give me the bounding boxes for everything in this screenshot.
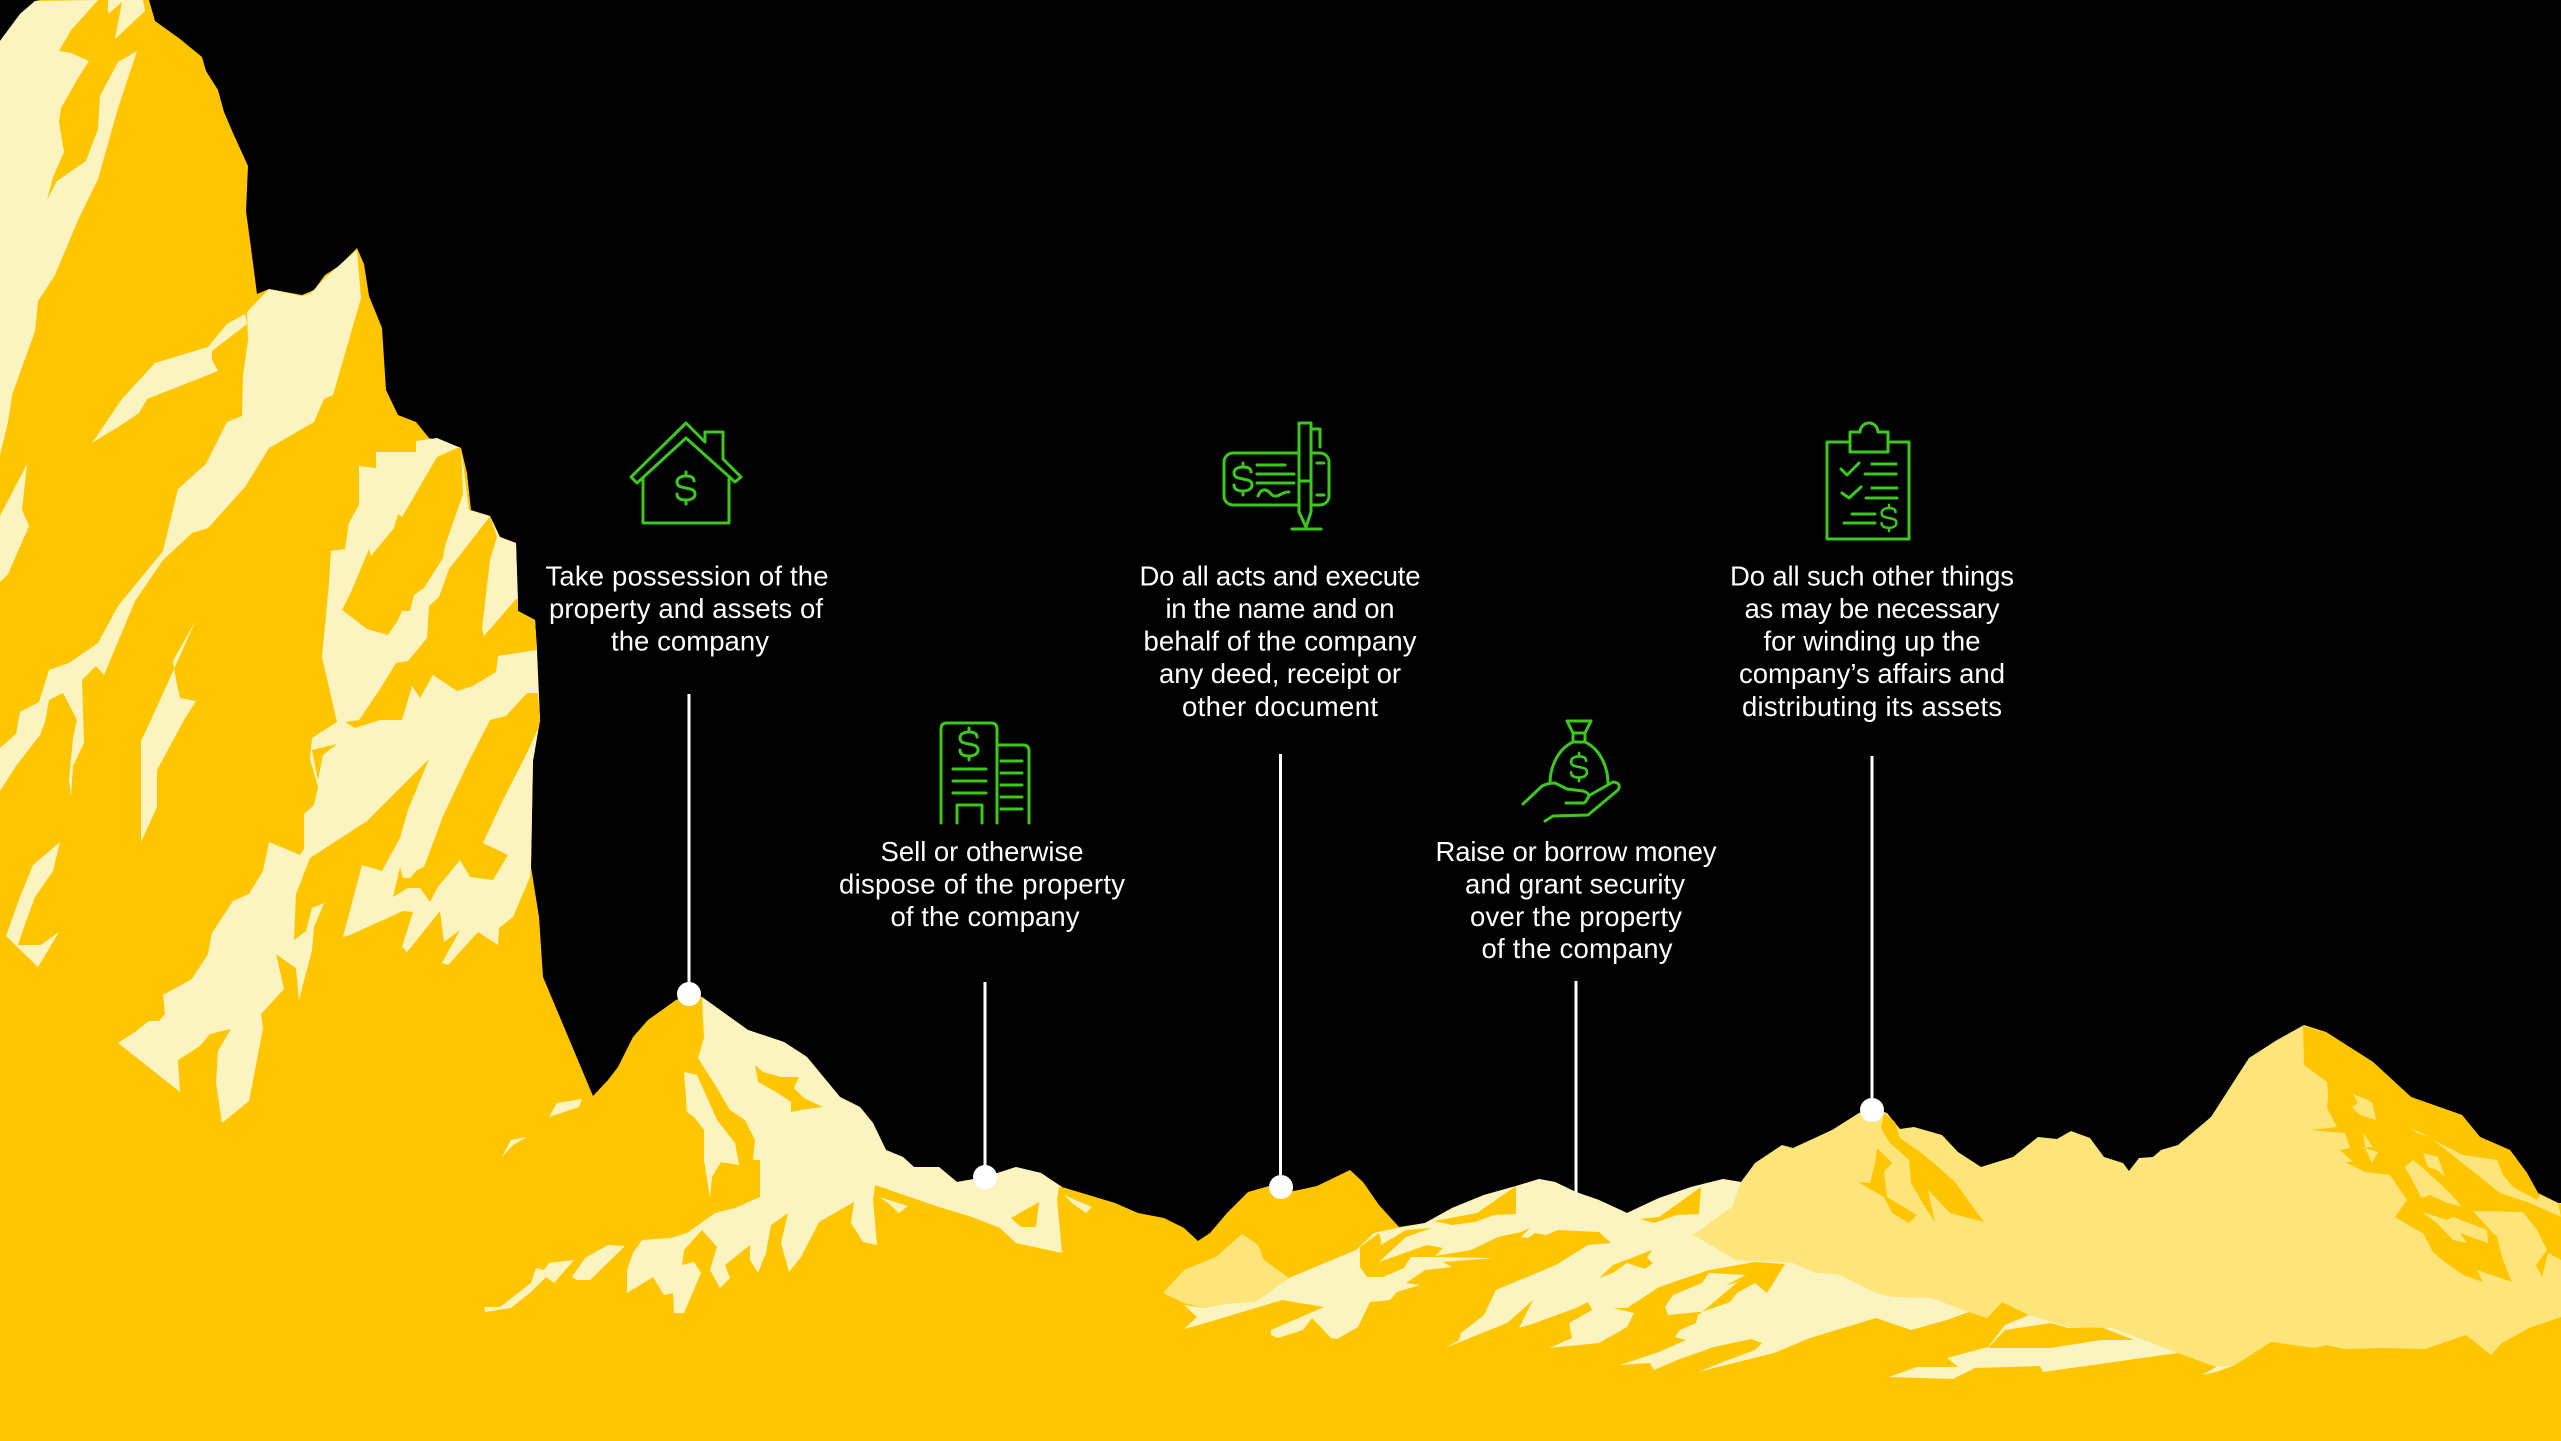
connector line 5 with marker	[1860, 756, 1884, 1122]
text: raise or borrow: and grant security	[1465, 869, 1685, 900]
text: do all acts: Do all acts and execute	[1140, 560, 1420, 592]
pale gaps in shadow face	[2352, 1094, 2561, 1243]
connector line 2 with marker	[973, 982, 997, 1189]
icon: buildings with dollar	[941, 723, 1029, 823]
text: raise or borrow: Raise or borrow money	[1436, 836, 1717, 867]
yellow shadow faces on pale mountains	[1858, 1026, 2561, 1282]
text: raise or borrow: of the company	[1482, 933, 1673, 964]
text: sell or dispose	[839, 836, 1125, 932]
text: do all such: Do all such other things	[1730, 560, 2014, 592]
text: do all such: distributing its assets	[1742, 691, 2002, 722]
text: do all acts: other document	[1182, 691, 1378, 722]
text: do all acts: behalf of the company	[1144, 626, 1417, 657]
text: take possession: property and assets of	[549, 593, 823, 624]
icon: clipboard checklist	[1827, 423, 1909, 539]
icon: cheque and pen	[1224, 423, 1329, 529]
text: raise or borrow	[1436, 836, 1717, 964]
text: do all such	[1730, 560, 2014, 722]
text: sell or dispose: of the company	[890, 901, 1080, 932]
text: take possession	[546, 560, 828, 657]
text: do all such: as may be necessary	[1744, 593, 2000, 624]
yellow cutouts: second peak	[755, 1065, 1039, 1227]
text: do all such: for winding up the	[1764, 626, 1980, 657]
pale patch on third peak	[1163, 1234, 1289, 1308]
cream island in ridge	[1665, 1273, 1746, 1315]
icon: money bag on hand	[1523, 721, 1619, 821]
text: do all acts: in the name and on	[1166, 593, 1394, 624]
text: sell or dispose: Sell or otherwise	[880, 836, 1084, 867]
yellow cutouts: central lower ridge	[1360, 1186, 2134, 1348]
connector line 4	[1574, 981, 1578, 1193]
text: raise or borrow: over the property	[1470, 901, 1682, 932]
connector line 1 with marker	[677, 694, 701, 1006]
text: do all acts	[1140, 560, 1420, 722]
text: take possession: the company	[611, 626, 769, 657]
cream snow: second peak	[484, 997, 1092, 1313]
cream snow: central lower ridge	[1184, 1179, 2178, 1379]
yellow shadow cutouts in snow: tall left peak	[312, 448, 540, 902]
text: take possession: Take possession of the	[546, 560, 828, 592]
pale distant mountains	[1693, 1025, 2561, 1367]
text: sell or dispose: dispose of the property	[839, 869, 1125, 900]
text: do all such: company’s affairs and	[1739, 658, 2005, 689]
cream snow patches: tall left peak	[0, 0, 540, 1123]
cream tip at base of pale mountain	[2202, 1362, 2235, 1375]
connector line 3 with marker	[1269, 754, 1293, 1199]
text: do all acts: any deed, receipt or	[1159, 658, 1401, 689]
icon: house with dollar	[631, 423, 741, 523]
